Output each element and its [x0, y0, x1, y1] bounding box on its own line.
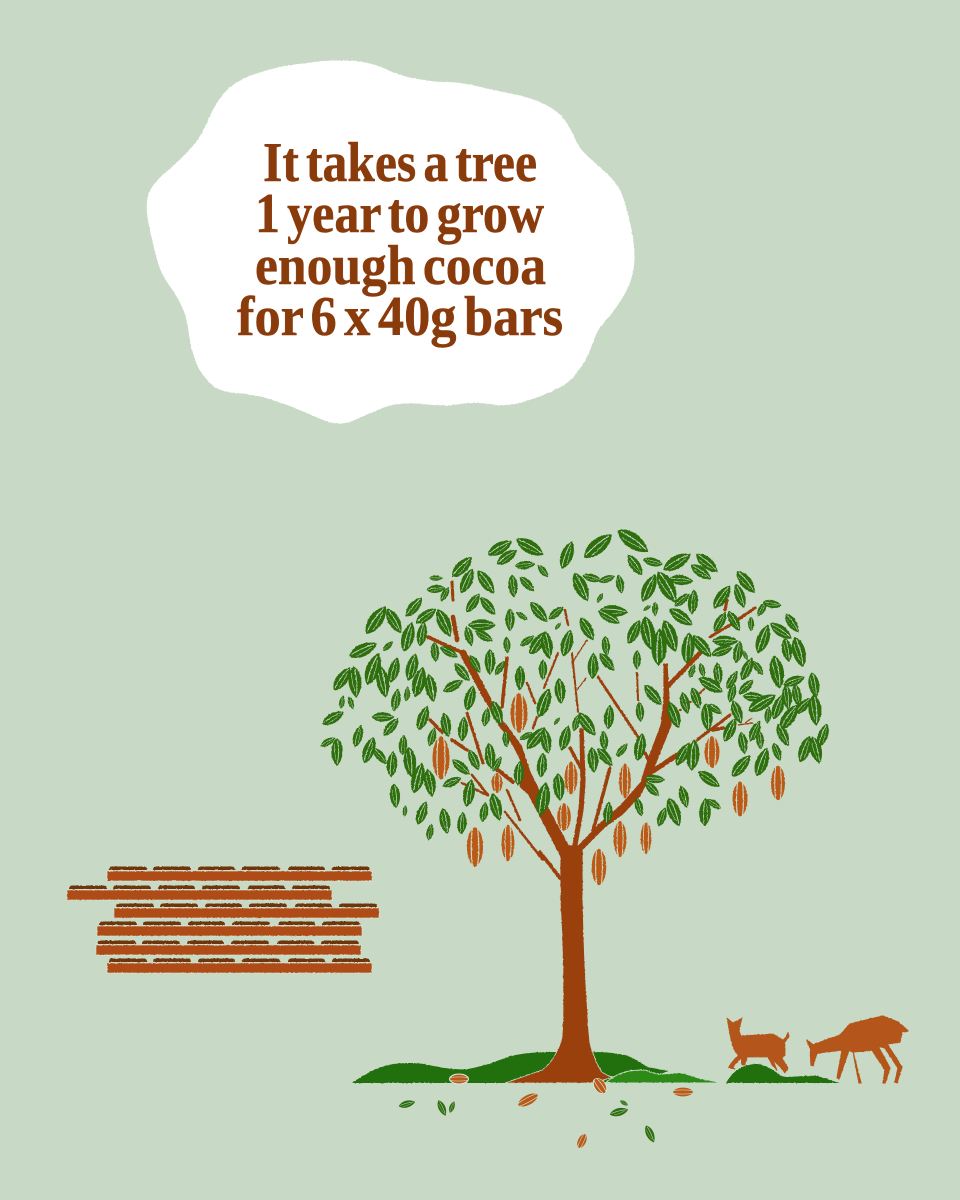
headline: enough cocoa [255, 235, 546, 297]
dark hill left [352, 1052, 668, 1083]
ground hills [352, 1052, 840, 1083]
dark hill right [726, 1064, 840, 1083]
leaves [319, 524, 832, 841]
headline: 1 year to grow [255, 183, 544, 245]
cocoa tree [319, 524, 832, 1083]
white blob [147, 60, 634, 424]
trunk and branches [428, 582, 755, 1083]
headline: It takes a tree [263, 132, 537, 194]
fallen pods and leaves [398, 1074, 693, 1150]
headline [237, 132, 563, 348]
large deer [807, 1016, 908, 1083]
small deer [727, 1018, 789, 1073]
stack of six chocolate bars [67, 866, 379, 973]
speech blob with headline [147, 60, 634, 424]
light hill [605, 1070, 723, 1083]
headline: for 6 x 40g bars [237, 286, 563, 348]
cocoa pods [433, 693, 785, 885]
